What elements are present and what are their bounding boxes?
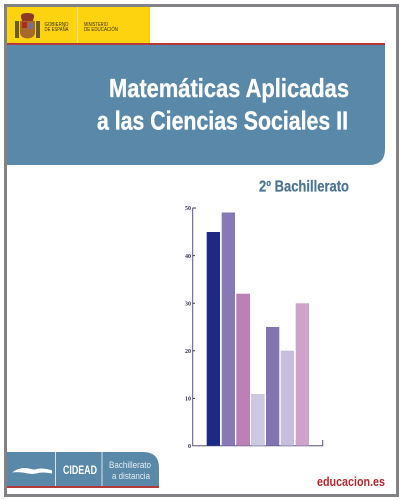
axis labels: 20 [185, 349, 191, 355]
axes [193, 208, 323, 446]
axis labels: 10 [185, 396, 191, 402]
CIDEAD footer panel [7, 452, 159, 488]
axis labels [185, 206, 191, 450]
axis labels: 50 [185, 206, 191, 212]
axis labels: 0 [188, 444, 191, 450]
icon: coat of arms [15, 13, 40, 38]
subtitle: 2º Bachillerato [259, 178, 349, 196]
website label: educacion.es [317, 475, 385, 489]
icon: open book [12, 468, 52, 474]
axis labels: 30 [185, 302, 191, 308]
ministry label: MINISTERIO [84, 22, 108, 28]
red rule [7, 43, 385, 45]
axis labels: 40 [185, 254, 191, 260]
title panel [7, 45, 385, 165]
bar chart [185, 206, 323, 450]
ministry label: DE EDUCACIÓN [84, 26, 118, 33]
title: Matemáticas Aplicadas [109, 73, 349, 103]
bars [207, 212, 309, 446]
government label: DE ESPAÑA [44, 26, 69, 33]
government logo band [7, 7, 150, 43]
title: a las Ciencias Sociales II [97, 105, 348, 135]
programme label: a distancia [112, 471, 150, 481]
government label: GOBIERNO [44, 22, 68, 28]
programme label: Bachillerato [109, 460, 151, 470]
CIDEAD label: CIDEAD [63, 464, 97, 477]
